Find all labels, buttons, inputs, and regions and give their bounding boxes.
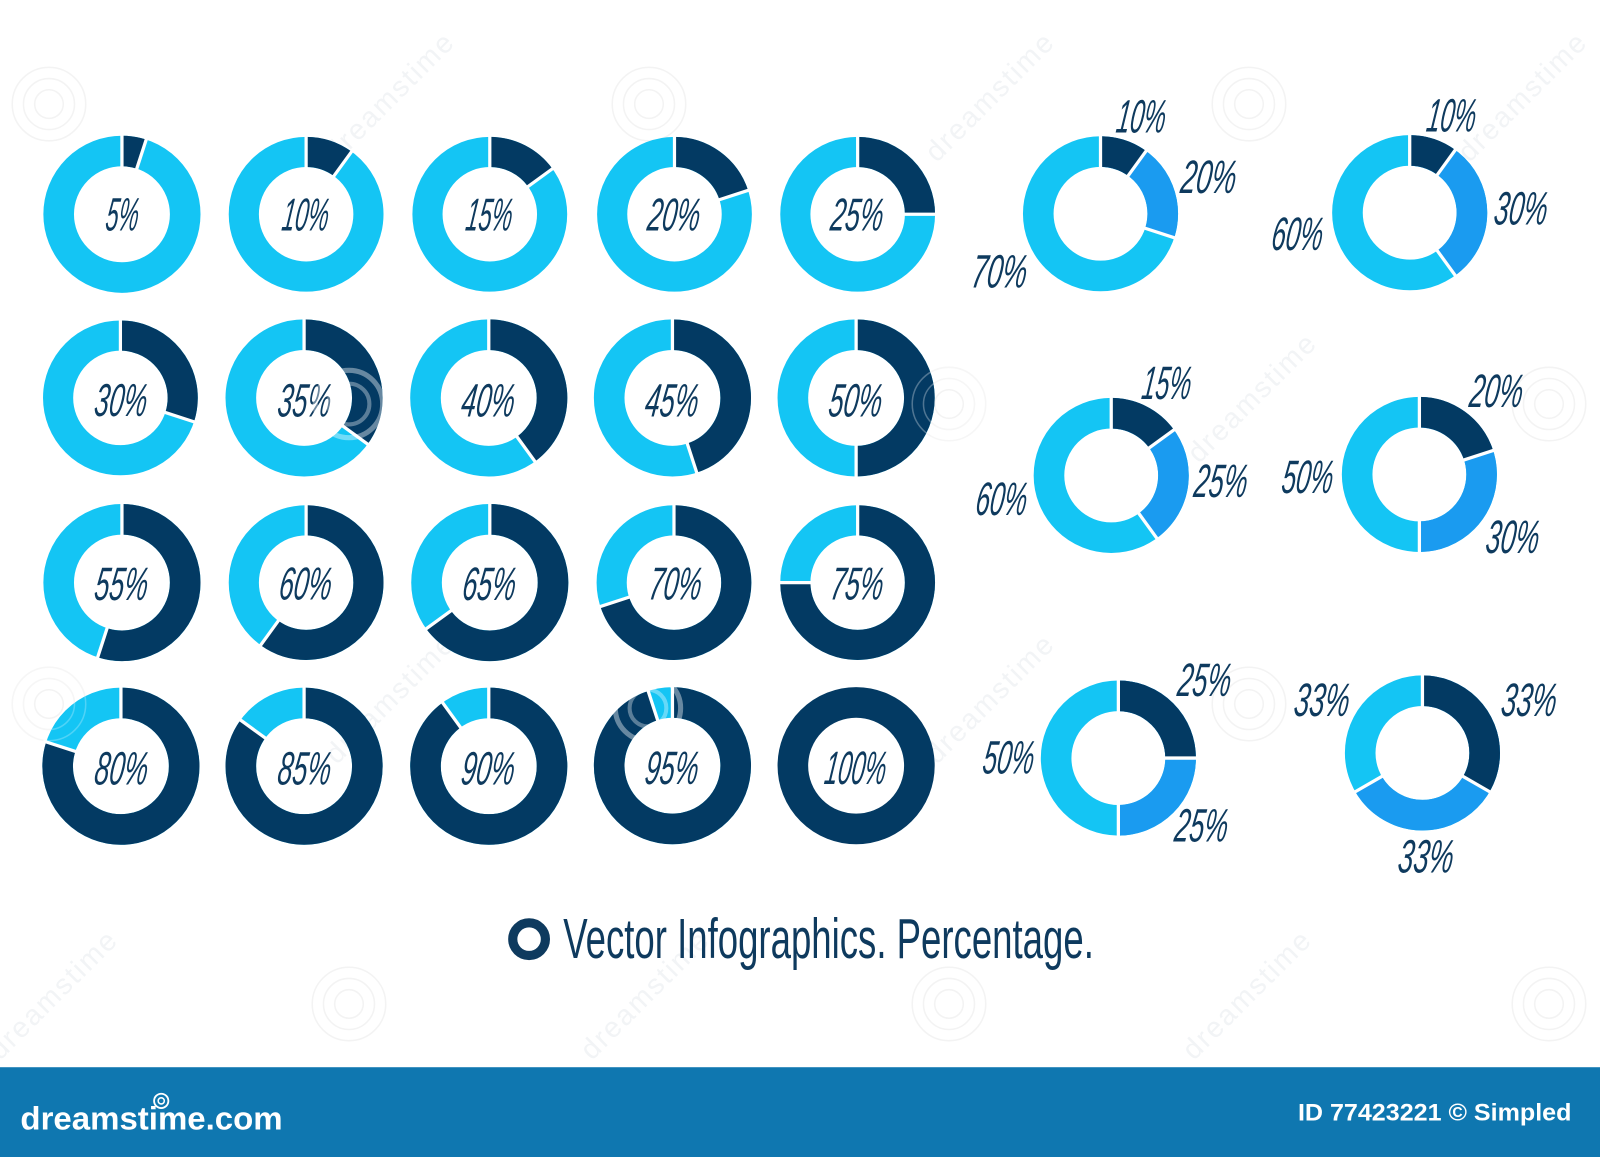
donut: 40% — [426, 316, 552, 464]
donut: 30%: 30% — [92, 374, 151, 426]
donut: 5%: 5% — [103, 188, 143, 241]
donut: 100% — [793, 702, 919, 829]
donut: 35% — [241, 316, 370, 461]
donut: 65% — [424, 501, 553, 646]
label: 60%: 60% — [973, 472, 1031, 525]
donut: 100%: 100% — [822, 741, 890, 794]
donut: 55%: 55% — [92, 557, 152, 610]
label: 33%: 33% — [1395, 830, 1458, 882]
label: 33%: 33% — [1498, 673, 1561, 726]
donut: 35%: 35% — [275, 373, 335, 426]
label: 30%: 30% — [1483, 510, 1544, 563]
donut: 20 30 50 — [1357, 394, 1496, 555]
donut: 5% — [59, 133, 185, 278]
donut: 70% — [598, 502, 736, 645]
donut: 10 30 60 — [1347, 132, 1472, 278]
text: dreamstime — [1452, 26, 1594, 168]
text: dreamstime — [319, 26, 462, 168]
donut: 30% — [58, 318, 197, 460]
donut: 10% — [244, 134, 368, 277]
donut: 60% — [244, 502, 368, 648]
donut: 15 25 60 — [1049, 395, 1176, 541]
donut: 80% — [43, 685, 184, 829]
label: 15%: 15% — [1139, 356, 1196, 409]
label: 20%: 20% — [1177, 150, 1240, 203]
donut: 10 20 70 — [1038, 133, 1177, 276]
donut: 25% — [795, 134, 938, 277]
label: 25%: 25% — [1174, 653, 1235, 706]
donut: 50%: 50% — [826, 373, 886, 426]
label: 30%: 30% — [1491, 182, 1552, 234]
label: 25%: 25% — [1191, 454, 1252, 507]
text: dreamstime — [919, 628, 1062, 770]
donut: 70%: 70% — [646, 558, 706, 610]
icon: title ring — [513, 923, 545, 955]
label: 10%: 10% — [1424, 89, 1480, 142]
donut: 85% — [238, 685, 367, 829]
footer logo: dreamstime.com — [20, 1099, 283, 1136]
donut: 75%: 75% — [828, 558, 887, 610]
footer credit: ID 77423221 © Simpled — [1298, 1099, 1571, 1126]
donut: 45%: 45% — [642, 373, 703, 426]
donut: 95%: 95% — [642, 741, 703, 794]
text: dreamstime — [574, 924, 717, 1066]
label: 25%: 25% — [1171, 799, 1232, 852]
donut: 75% — [777, 502, 920, 645]
donut: 25 25 50 — [1056, 677, 1199, 839]
text: dreamstime — [319, 628, 462, 770]
donut: 95% — [609, 684, 736, 829]
donut: 25%: 25% — [827, 189, 887, 240]
donut: 33 33 33 — [1353, 672, 1492, 815]
donut: 80%: 80% — [92, 742, 152, 795]
donut: 65%: 65% — [460, 557, 520, 610]
label: 33%: 33% — [1291, 673, 1354, 726]
donut: 15% — [427, 134, 555, 277]
donut: 10%: 10% — [279, 189, 333, 240]
donut: 20%: 20% — [644, 189, 704, 240]
donut: 55% — [59, 501, 185, 660]
donut: 60%: 60% — [276, 558, 336, 610]
donut: 50% — [793, 316, 919, 480]
donut: 15%: 15% — [463, 189, 517, 240]
label: 20%: 20% — [1466, 364, 1527, 417]
label: 60%: 60% — [1269, 207, 1327, 260]
text: dreamstime — [919, 26, 1062, 168]
text: dreamstime — [1181, 327, 1324, 469]
donut: 45% — [609, 316, 736, 476]
donut: 40%: 40% — [459, 373, 519, 426]
donut: 90% — [426, 685, 552, 829]
donut: 90%: 90% — [459, 742, 519, 795]
footer bar — [0, 1067, 1600, 1157]
label: 50%: 50% — [1279, 450, 1337, 503]
label: 70%: 70% — [969, 245, 1031, 298]
label: 50%: 50% — [980, 731, 1038, 783]
donut: 85%: 85% — [275, 742, 335, 795]
donut: 20% — [612, 134, 751, 277]
label: 10%: 10% — [1114, 90, 1170, 143]
title: Vector Infographics. Percentage. — [563, 907, 1094, 970]
text: dreamstime — [1176, 924, 1319, 1066]
